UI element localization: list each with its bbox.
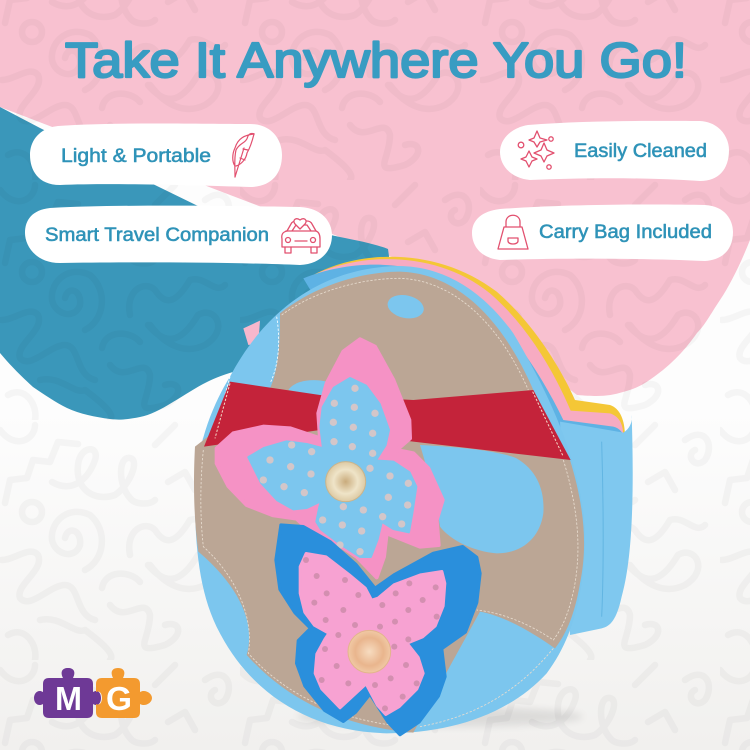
back pages (303, 257, 625, 550)
logo letter G: G (106, 680, 132, 717)
holes: pink wing (303, 557, 440, 711)
logo purple piece (34, 668, 101, 718)
butterfly top: blue perforated layer (249, 378, 416, 557)
red band (204, 382, 571, 460)
pill: carry bag included (472, 204, 733, 261)
product: felt quiet book (194, 257, 633, 735)
egg base (195, 266, 585, 733)
label: carry bag included: Carry Bag Included (539, 222, 712, 243)
label: light and portable: Light & Portable (61, 146, 211, 167)
band stitching (215, 383, 563, 457)
pill: smart travel companion (25, 206, 332, 265)
strap (560, 415, 633, 635)
title: Take It Anywhere You Go! (65, 34, 687, 88)
logo: MG puzzle pieces (34, 668, 152, 718)
label: smart travel companion: Smart Travel Companion (45, 225, 269, 246)
holes: blue wing (260, 385, 412, 555)
teal wave panel (0, 107, 395, 420)
pill: easily cleaned (500, 121, 729, 181)
butterfly bottom: pink perforated layer (300, 553, 445, 715)
butterfly bottom: blue layer (276, 525, 480, 735)
icon: sparkles (518, 131, 554, 169)
label: easily cleaned: Easily Cleaned (574, 141, 707, 162)
ground shadow (297, 707, 583, 727)
icon: car with heart (282, 219, 320, 253)
icon: handbag (498, 215, 528, 249)
icon: feather (233, 134, 254, 177)
strap stitching (602, 442, 603, 617)
butterfly top: pink layer (217, 339, 443, 577)
blue spot right (420, 445, 544, 553)
pill: light and portable (30, 124, 282, 187)
button bottom (348, 630, 391, 673)
small blue spot under band (288, 380, 327, 397)
logo orange piece (96, 668, 152, 718)
button top (326, 462, 366, 502)
logo letter M: M (55, 680, 82, 717)
pink wave panel (0, 0, 750, 396)
stitching (201, 278, 578, 727)
hole (385, 292, 426, 322)
small pink tab (243, 321, 260, 345)
egg tan felt (194, 272, 584, 733)
